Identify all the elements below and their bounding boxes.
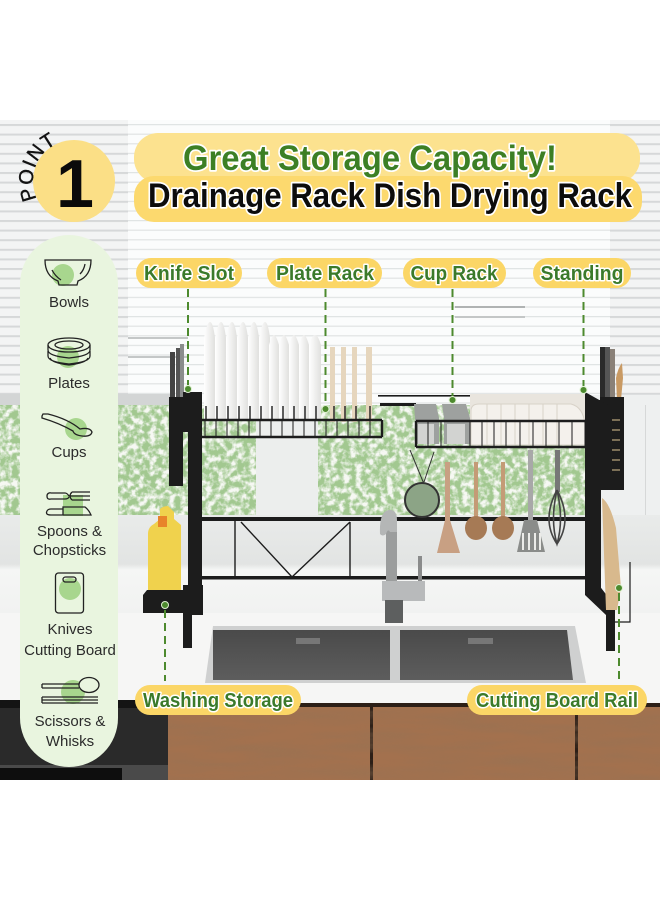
label: spoons and chopsticks: Chopsticks	[33, 542, 106, 559]
left posts	[183, 392, 203, 648]
wooden spatula	[437, 462, 460, 553]
hanging utensils	[405, 450, 565, 553]
wooden spoon two	[492, 462, 514, 540]
icon: plates	[48, 338, 90, 368]
banner background	[134, 133, 642, 222]
right knives and spatula	[600, 347, 623, 400]
callout: plate rack	[267, 258, 382, 412]
faucet	[380, 510, 425, 623]
panel: left category list	[20, 235, 118, 767]
icon: bowl	[45, 260, 91, 286]
left knife holder	[169, 397, 183, 486]
icon: spoon	[42, 414, 92, 440]
callout: standing: Standing	[540, 263, 624, 285]
soap bottle	[148, 506, 181, 597]
label: scissors and whisks: Whisks	[46, 733, 94, 750]
label: knives cutting board	[24, 621, 116, 659]
callout: cutting board rail: Cutting Board Rail	[476, 690, 638, 712]
callout: knife slot: Knife Slot	[144, 263, 234, 285]
slotted turner	[517, 450, 545, 552]
label: scissors and whisks	[35, 713, 105, 750]
title banner	[134, 133, 642, 222]
plate basket	[194, 406, 382, 437]
kitchen photo background	[0, 120, 660, 780]
knives in left slot	[170, 344, 184, 398]
callout: standing	[533, 258, 631, 394]
yellow circle	[33, 140, 115, 222]
callout: plate rack: Plate Rack	[276, 263, 375, 285]
label: scissors and whisks: Scissors &	[35, 713, 105, 730]
label: spoons and chopsticks: Spoons &	[37, 523, 102, 540]
right posts and foot	[585, 400, 615, 651]
wooden spoon one	[465, 462, 487, 540]
callout: washing storage: Washing Storage	[143, 690, 293, 712]
label: cups: Cups	[51, 444, 87, 461]
title line two: Drainage Rack Dish Drying Rack	[148, 177, 632, 215]
garden view through the window	[0, 395, 660, 560]
stacked bowls	[470, 394, 600, 445]
strainer	[405, 450, 439, 517]
label: knives cutting board: Knives	[47, 621, 93, 638]
icon: cutting board	[56, 573, 84, 613]
label: spoons and chopsticks	[33, 523, 106, 559]
icon: fork and knife	[46, 492, 91, 516]
dark oven	[0, 700, 168, 780]
dish rack	[143, 322, 630, 651]
numeral 1: 1	[56, 146, 94, 222]
wall below the window	[0, 515, 660, 613]
cups	[414, 404, 470, 444]
label: bowls: Bowls	[49, 294, 89, 311]
window blinds	[0, 120, 660, 405]
wooden cabinets	[168, 703, 660, 780]
label: knives cutting board: Cutting Board	[24, 642, 116, 659]
rail behind cutting board	[610, 562, 630, 622]
whisk	[549, 450, 565, 544]
callout: cutting board rail	[467, 584, 647, 715]
callout: knife slot	[136, 258, 242, 392]
right basket	[416, 421, 602, 447]
sink	[205, 626, 586, 683]
callout: cup rack	[403, 258, 506, 404]
callout: cup rack: Cup Rack	[410, 263, 498, 285]
curved word POINT: POINT	[18, 132, 52, 202]
title line one: Great Storage Capacity!	[183, 139, 557, 178]
V-shaped wire frame	[235, 521, 350, 578]
tall white plates	[204, 322, 321, 420]
icon: scissors and whisk	[42, 678, 99, 704]
right cutlery holder	[585, 392, 624, 490]
wooden boards	[330, 347, 372, 422]
middle bars	[202, 517, 587, 580]
badge: point 1	[18, 132, 115, 222]
label: plates: Plates	[48, 375, 90, 392]
top shelf rails	[378, 395, 470, 406]
cutting board	[602, 498, 621, 610]
marble countertop	[0, 613, 660, 707]
soap tray	[143, 585, 193, 613]
callout: washing storage	[135, 602, 301, 715]
